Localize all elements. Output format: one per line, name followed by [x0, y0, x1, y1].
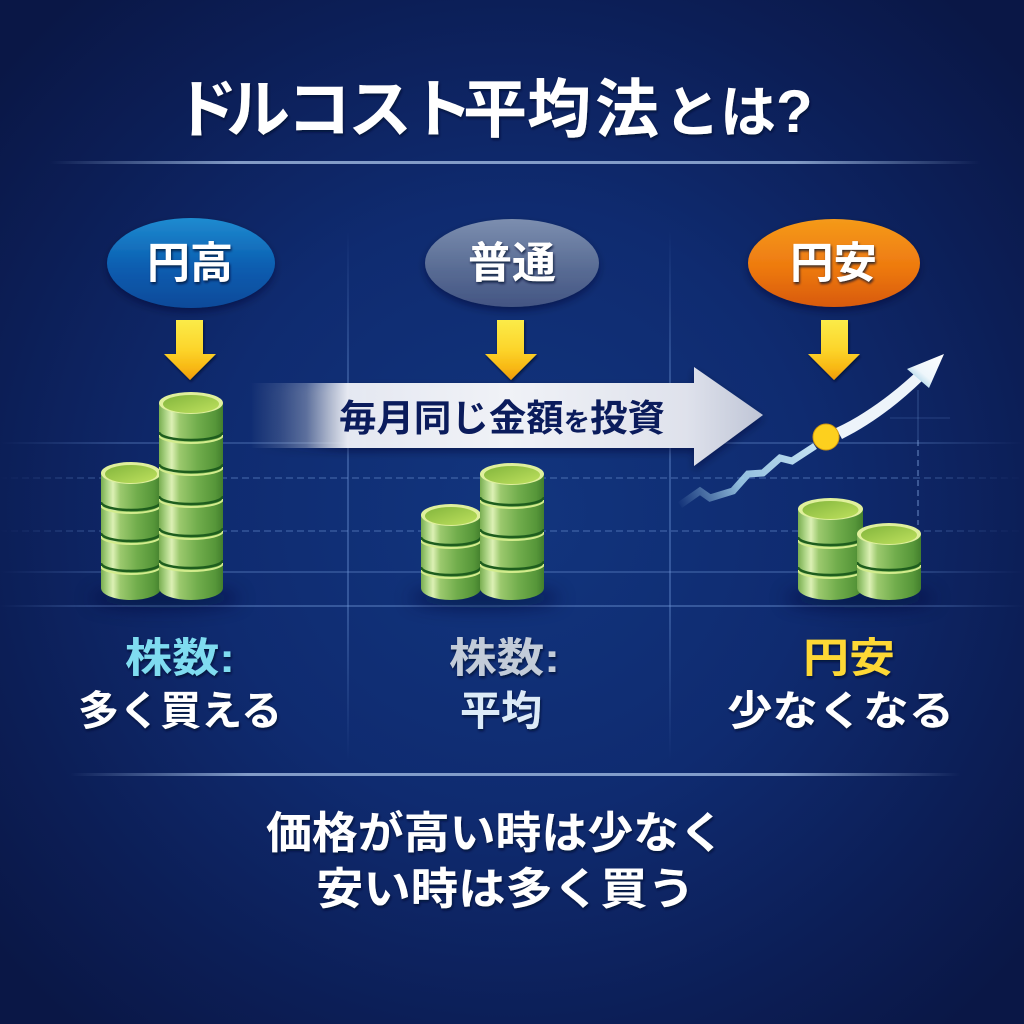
label: 多く買える: 多く買える — [78, 688, 282, 734]
top divider — [50, 161, 980, 164]
bottom divider — [70, 773, 960, 776]
arrow: down — [164, 320, 216, 380]
arrow head — [907, 354, 944, 388]
pill: 円高 — [107, 218, 275, 308]
column: 円安 — [727, 219, 954, 734]
label: 平均: 平均 — [460, 688, 542, 734]
coin stacks: average — [410, 463, 560, 608]
title: ? — [776, 78, 813, 145]
pill: 円高: 円高 — [147, 240, 233, 288]
title: ドルコスト — [174, 74, 473, 146]
arrow: down — [485, 320, 537, 380]
summary line 1: 価格が高い時は少なく — [266, 809, 725, 858]
title: 平均法 — [463, 74, 659, 146]
coin stacks: few — [785, 498, 935, 608]
pill: 普通: 普通 — [468, 240, 556, 288]
column: 普通 — [410, 219, 599, 734]
arrow: down — [808, 320, 860, 380]
summary text — [266, 809, 725, 914]
column: 円高 — [78, 218, 282, 734]
arrow: monthly fixed investment — [250, 367, 763, 466]
pill: 円安: 円安 — [790, 240, 877, 288]
arrow label: 毎月同じ金額を投資 — [339, 398, 665, 439]
summary line 2: 安い時は多く買う — [316, 865, 695, 914]
label: 少なくなる: 少なくなる — [727, 688, 954, 734]
chart grid background — [0, 230, 1024, 760]
pill: 円安 — [748, 219, 920, 307]
current point marker — [813, 424, 839, 450]
title: とは — [664, 81, 776, 144]
label: 株数: 株数: — [125, 635, 235, 681]
coin stacks: many — [90, 392, 240, 608]
rising price line — [680, 354, 944, 505]
label: 株数: 株数: — [449, 635, 560, 681]
pill: 普通 — [425, 219, 599, 307]
label: 円安: 円安 — [803, 635, 895, 681]
